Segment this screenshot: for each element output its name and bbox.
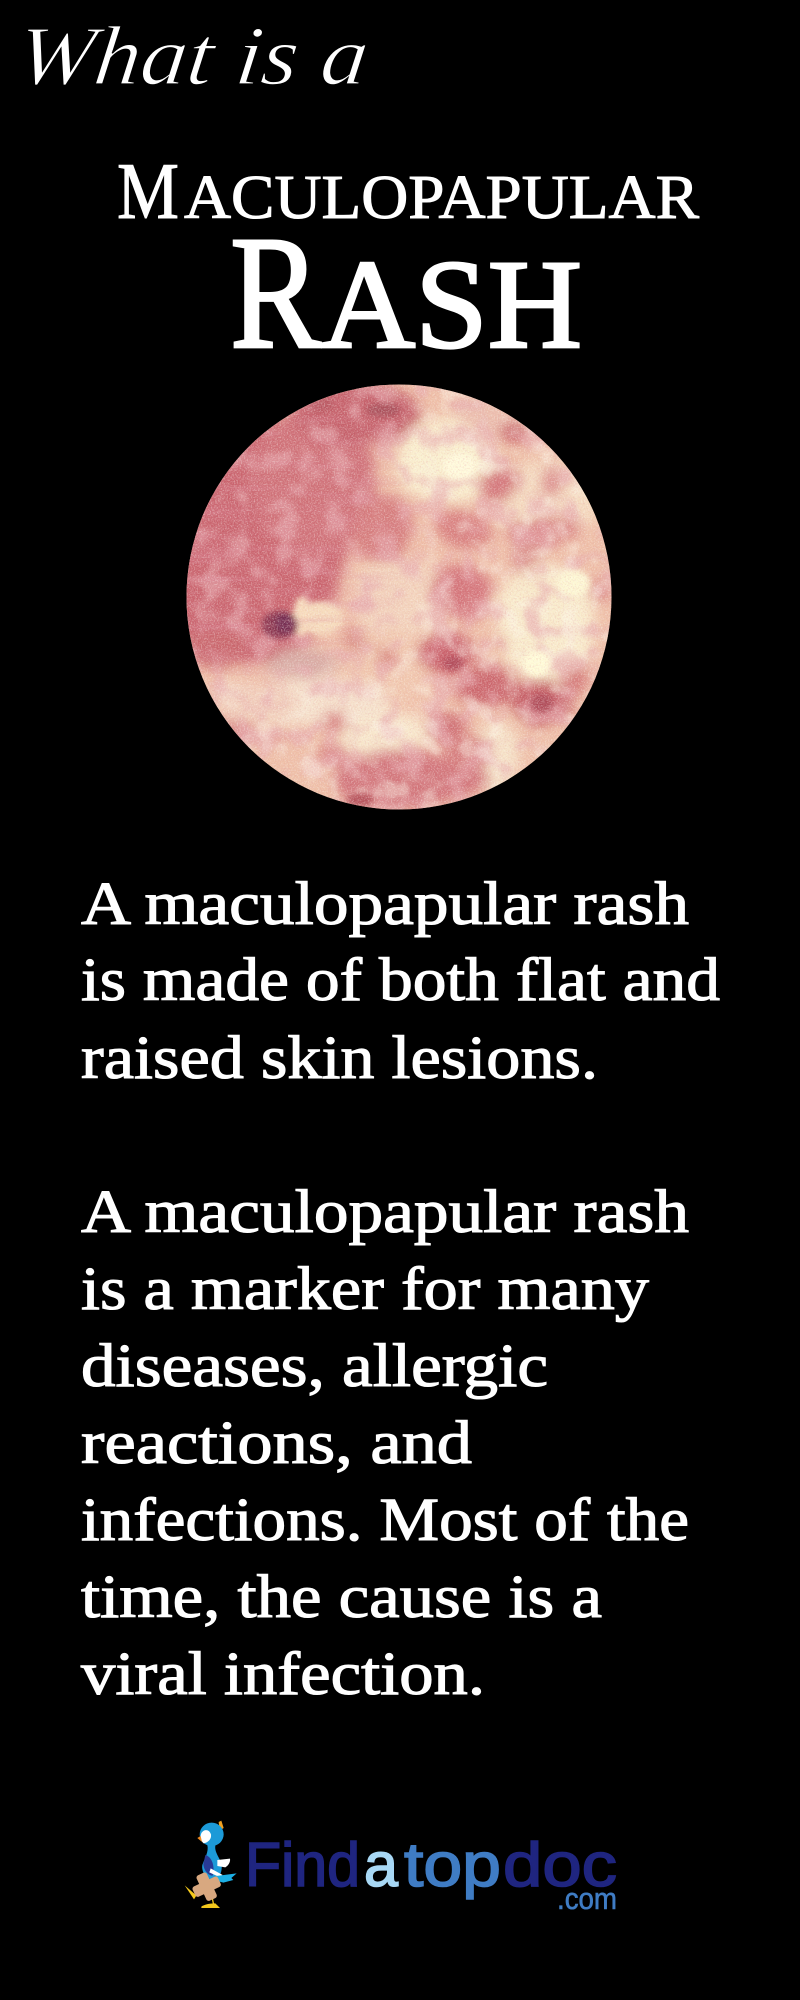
paragraph 1: raised skin lesions. [81,1025,598,1092]
wordmark: doc [503,1831,617,1900]
paragraph 2: is a marker for many [81,1256,650,1323]
title: Maculopapular: M [117,148,179,236]
mottling: red patches [186,384,612,810]
skin grain texture: light speckle [186,384,612,810]
photo: maculopapular rash on skin [186,384,612,810]
highlights and dark lesion [262,399,590,807]
paragraph 1: is made of both flat and [81,947,720,1014]
wordmark: a [364,1831,399,1900]
skin grain texture: dark speckle [186,384,612,810]
wordmark: Find [245,1831,360,1900]
paragraph 2: diseases, allergic [81,1333,548,1400]
paragraph 2: reactions, and [81,1410,472,1477]
icon: duck mascot with bandage [185,1821,237,1908]
paragraph 2: infections. Most of the [81,1487,689,1554]
title: Rash: ASH [321,235,582,375]
logo: Findatopdoc.com [185,1821,617,1916]
paragraph 2: time, the cause is a [81,1564,602,1631]
paragraph 1: A maculopapular rash [81,871,689,938]
wordmark: top [404,1831,501,1900]
paragraph 1 [81,871,720,1092]
script heading: What is a: What is a [12,10,374,103]
title: Maculopapular: ACULOPAPULAR [184,164,700,232]
skin streak texture [188,404,397,674]
mottling: pale patches [186,384,612,810]
paragraph 2: A maculopapular rash [81,1179,689,1246]
paragraph 2 [81,1179,689,1708]
title: Rash: R [230,204,321,383]
paragraph 2: viral infection. [81,1641,485,1708]
wordmark suffix: .com: .com [557,1881,617,1916]
